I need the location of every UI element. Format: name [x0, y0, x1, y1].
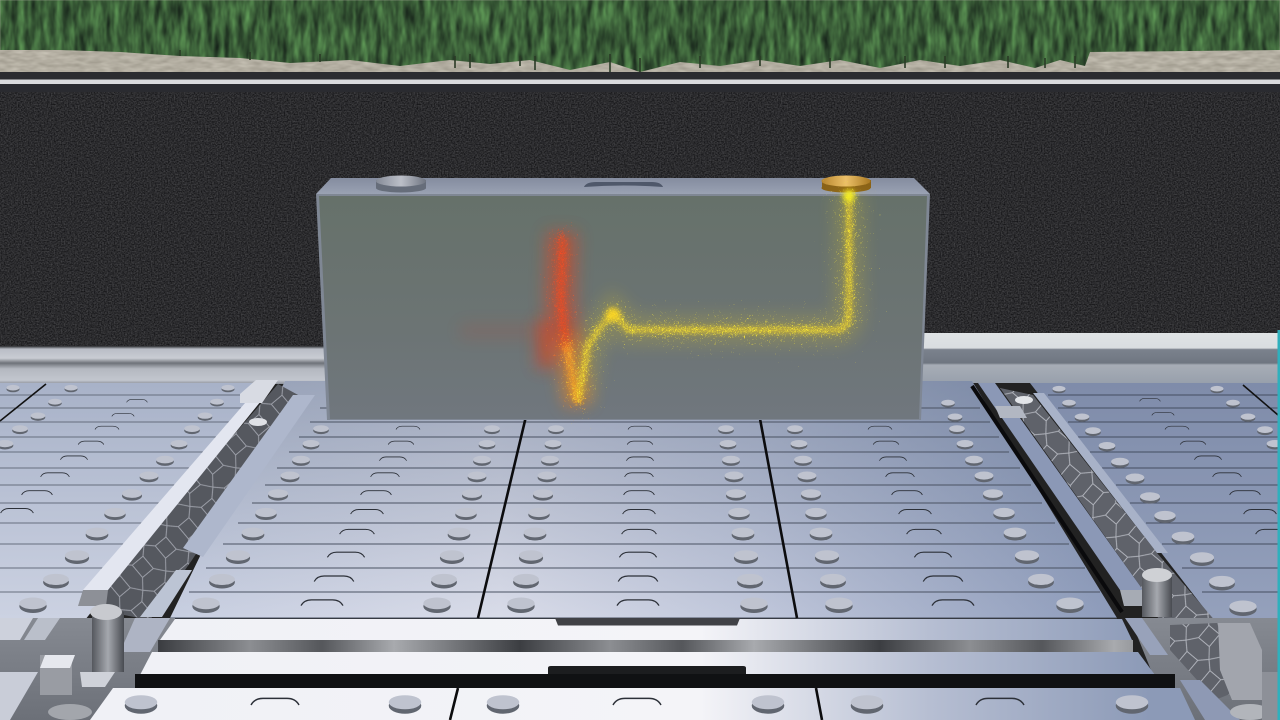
centre column 3 bolts — [787, 400, 1084, 613]
negative terminal — [376, 176, 426, 192]
road with white line — [0, 72, 1280, 348]
orange falling streak — [566, 340, 578, 405]
metal rail — [0, 333, 1280, 384]
cyan edge line — [1278, 330, 1280, 720]
centre column 1 bolts — [192, 425, 500, 613]
red discharge streak — [460, 232, 567, 368]
battery casing edge — [316, 194, 930, 420]
right honeycomb spacer and bars — [972, 383, 1232, 690]
battery lid — [316, 178, 930, 194]
vent slot — [584, 182, 663, 187]
positive terminal — [822, 176, 871, 192]
bottom left fixings — [0, 604, 175, 720]
centre column 2 bolts — [507, 425, 768, 613]
battery cell — [316, 176, 930, 420]
current path particle trail — [460, 190, 855, 405]
grass verge — [0, 0, 1280, 75]
right cell block — [1030, 383, 1280, 660]
left honeycomb spacer and bars — [78, 380, 315, 620]
bottom right fixings — [1125, 568, 1280, 720]
yellow main trail — [578, 190, 855, 400]
centre cell block — [170, 381, 1117, 618]
left cell block — [0, 383, 272, 620]
long busbar strips — [135, 618, 1175, 688]
battery front face — [319, 196, 927, 419]
bottom cell row — [90, 688, 1195, 720]
